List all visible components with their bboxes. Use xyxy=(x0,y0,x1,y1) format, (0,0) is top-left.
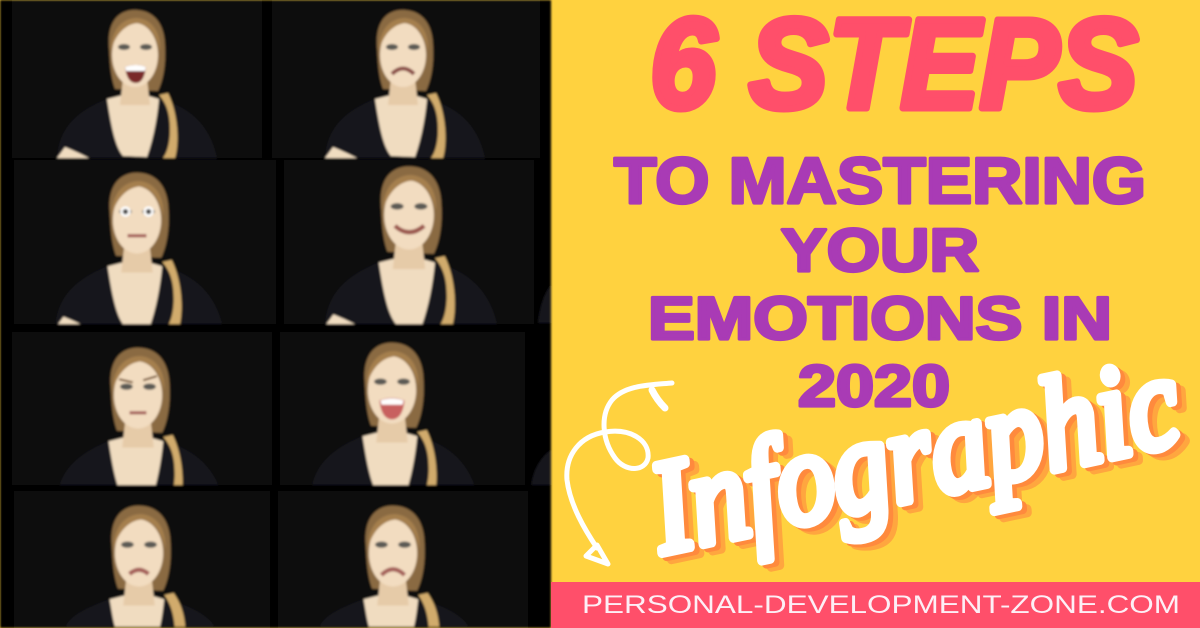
row 3 expressions xyxy=(0,324,551,503)
row 4 expressions xyxy=(0,485,551,628)
photo: wide-eyed surprised face xyxy=(55,173,223,328)
photo: partial shoulder at edge xyxy=(538,285,551,323)
row 2 expressions xyxy=(0,158,551,328)
photo collage of facial expressions xyxy=(0,0,551,628)
photo: sad frown face xyxy=(320,506,469,626)
photo: partial shoulder at edge xyxy=(531,450,551,487)
photo: disgusted frown xyxy=(325,10,485,158)
icon: curly arrow xyxy=(567,383,672,564)
footer band xyxy=(551,582,1200,628)
row 1 expressions xyxy=(12,0,540,158)
heading line 1: TO MASTERING xyxy=(614,144,1146,217)
background: yellow panel xyxy=(550,0,1200,628)
photo: excited face xyxy=(57,10,217,158)
heading line 3: EMOTIONS IN xyxy=(648,285,1112,352)
photo: suspicious face xyxy=(56,348,224,503)
script word: Infographic xyxy=(637,325,1200,589)
photo: tongue-out face xyxy=(310,343,478,498)
footer website address: PERSONAL-DEVELOPMENT-ZONE.COM xyxy=(582,591,1180,619)
subheading: to mastering your emotions in 2020 xyxy=(614,144,1146,419)
heading line 4: 2020 xyxy=(798,354,950,419)
heading line 2: YOUR xyxy=(781,217,979,284)
photo: smirking face xyxy=(325,166,498,326)
photo: sad pout face xyxy=(66,506,215,626)
